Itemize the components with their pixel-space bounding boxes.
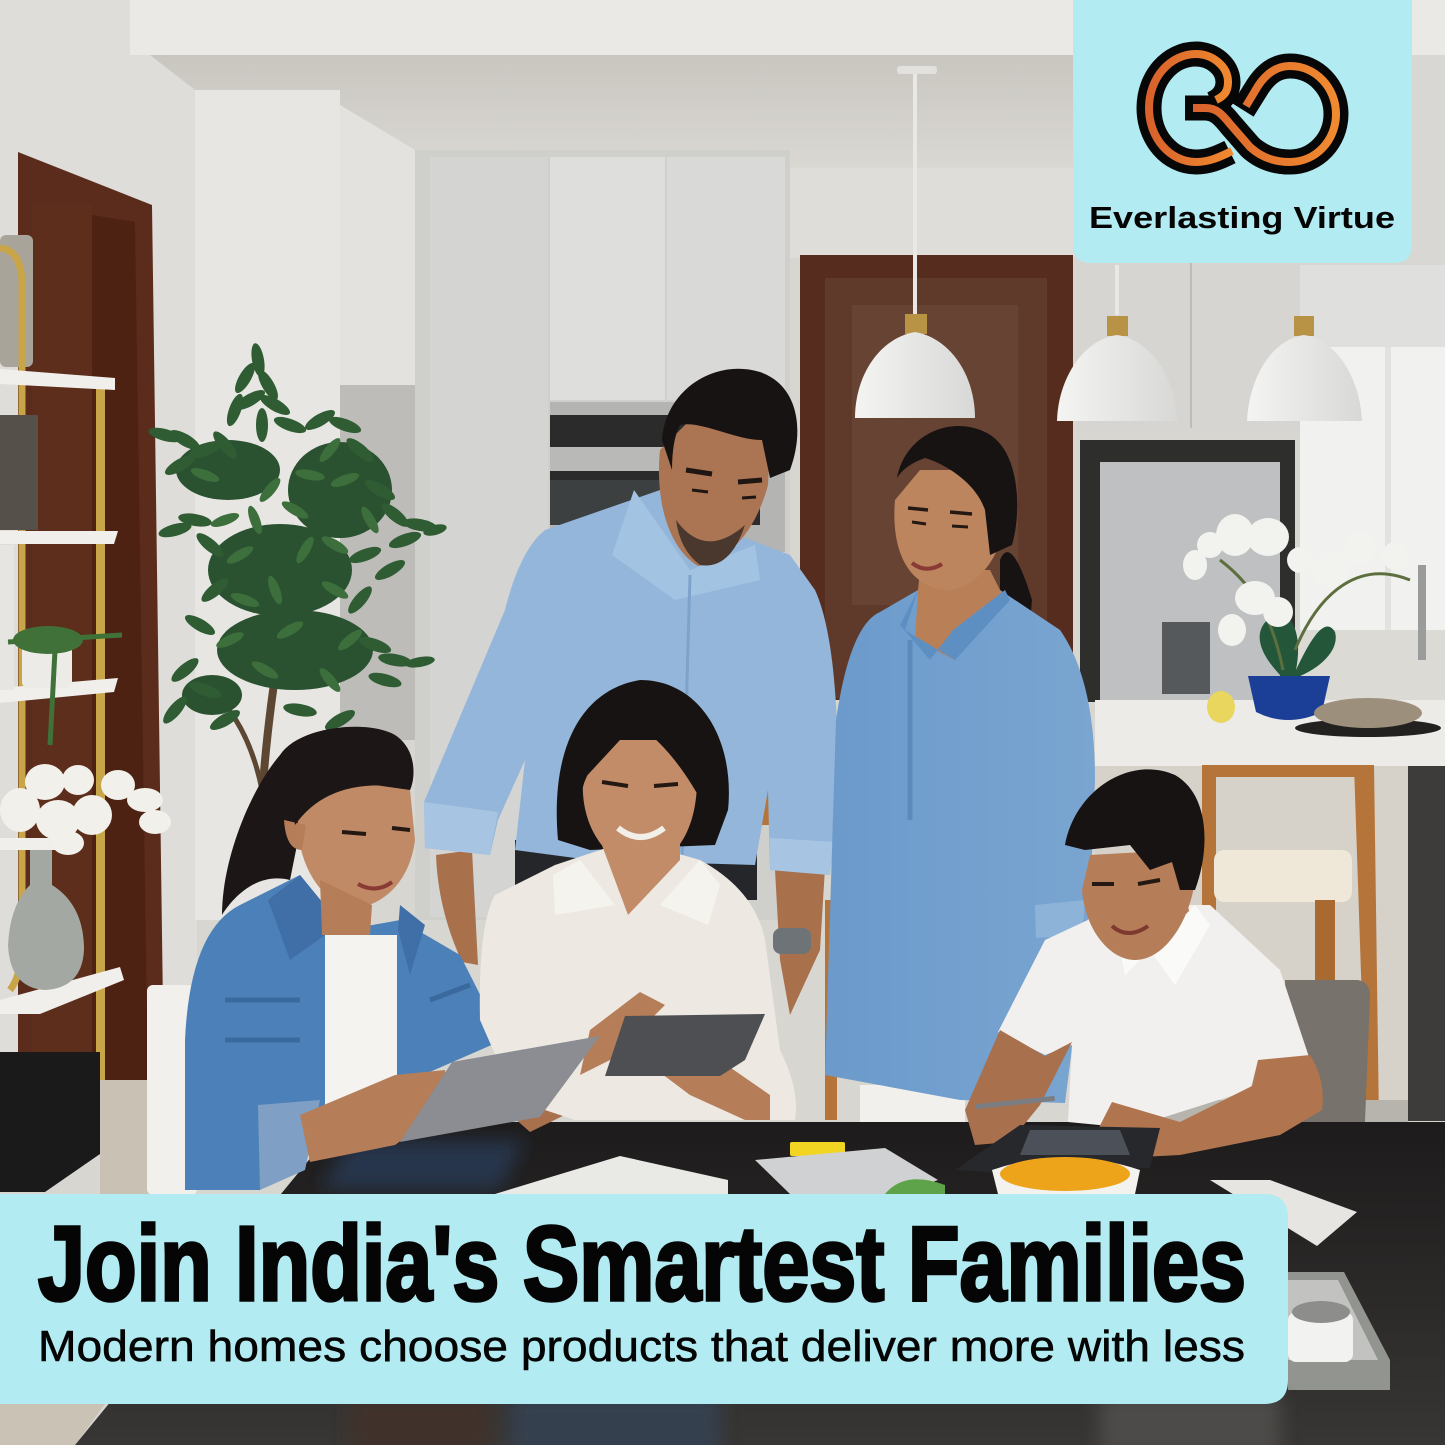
- subheadline: Modern homes choose products that deliver more with less: [38, 1322, 1245, 1371]
- table items: [495, 1125, 1390, 1390]
- girl in denim jacket: [185, 727, 575, 1190]
- white orchid on shelf: [0, 764, 171, 855]
- mother: [825, 426, 1095, 1122]
- boy: [965, 769, 1323, 1158]
- tray of shells on counter: [1207, 691, 1441, 737]
- girl in white shirt: [480, 680, 796, 1120]
- table reflections: [350, 1395, 1280, 1445]
- grey chair: [1285, 980, 1370, 1122]
- infinity logo mark: [1149, 54, 1336, 162]
- kitchen right: cabinets, fridge and window: [1078, 263, 1445, 702]
- brand name: Everlasting Virtue: [1089, 200, 1395, 235]
- tablets: [400, 1014, 765, 1142]
- father: [424, 369, 838, 1015]
- orchid plant with blue pot: [1183, 514, 1410, 720]
- shelving unit with decor: [0, 235, 124, 1192]
- logo panel: [1073, 0, 1412, 263]
- kitchen counter and stool: [760, 700, 1445, 1122]
- white chair back: [147, 985, 197, 1195]
- brown door, back wall: [800, 255, 1073, 700]
- floor and table: [0, 1080, 1445, 1445]
- potted tree: [147, 342, 448, 800]
- oven: [550, 415, 760, 525]
- brown door, left wall: [18, 152, 164, 1080]
- pendant lamps: [855, 66, 1362, 421]
- headline banner: [0, 1194, 1288, 1404]
